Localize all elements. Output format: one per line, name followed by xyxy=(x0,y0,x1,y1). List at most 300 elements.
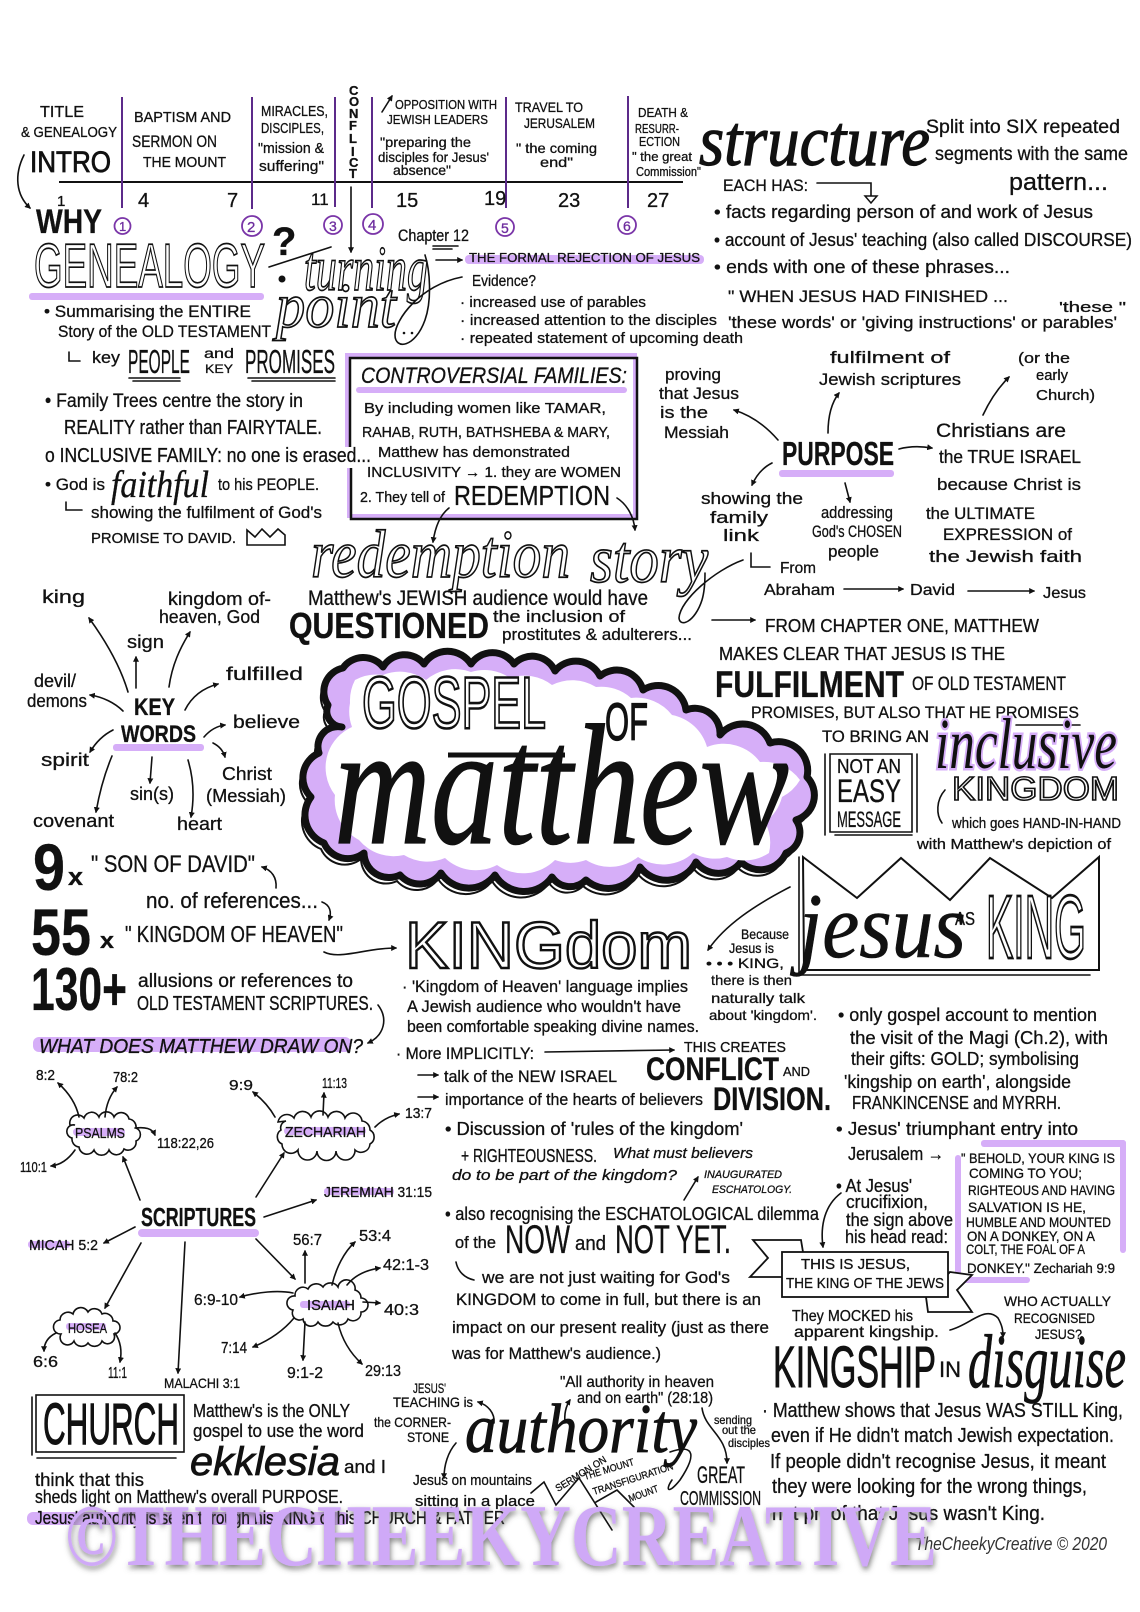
segment 5 label: ECTION xyxy=(639,134,680,149)
purpose notes: God's CHOSEN xyxy=(812,522,902,541)
key words list: kingdom of- xyxy=(168,589,271,609)
kingdom text: THIS CREATES xyxy=(684,1039,786,1056)
isaiah references: 53:4 xyxy=(359,1228,391,1245)
each has label and arrow xyxy=(723,176,877,203)
key words label: KEY xyxy=(134,694,175,721)
stat: 130+ allusions: 130+ xyxy=(31,956,127,1023)
isaiah references: 7:14 xyxy=(221,1340,247,1357)
key words highlight xyxy=(113,744,204,751)
redemption text: QUESTIONED xyxy=(289,605,489,646)
hosea cloud xyxy=(53,1308,120,1346)
conflict vertical label: L xyxy=(349,131,357,146)
scriptures hub: SCRIPTURES xyxy=(141,1202,256,1232)
highlight under title xyxy=(356,387,627,393)
arrow from intro to genealogy xyxy=(18,155,30,208)
genealogy text xyxy=(44,302,371,547)
stat: 55x kingdom of heaven: x xyxy=(100,928,115,953)
each has label and arrow: EACH HAS: xyxy=(723,176,808,195)
heading: kingdom: KINGdom xyxy=(405,908,692,982)
banner: this is Jesus: THIS IS JESUS, xyxy=(801,1256,910,1273)
zechariah references: 9:9 xyxy=(229,1077,253,1094)
key words arrows xyxy=(89,618,225,817)
teaching cornerstone note xyxy=(374,1380,494,1478)
rules of the kingdom text: + RIGHTEOUSNESS. xyxy=(461,1146,597,1166)
stat: 9x son of David: 9 xyxy=(33,830,65,904)
fulfilment text: FROM CHAPTER ONE, MATTHEW xyxy=(765,616,1039,636)
arrows to redemption story xyxy=(433,498,635,542)
structure bullet list: " WHEN JESUS HAD FINISHED ... xyxy=(728,287,1008,306)
key words list: sin(s) xyxy=(130,784,174,804)
great commission note: COMMISSION xyxy=(680,1488,761,1510)
zechariah quote with purple bracket: HUMBLE AND MOUNTED xyxy=(966,1214,1111,1230)
stat: 130+ allusions xyxy=(31,956,384,1043)
genealogy text: PROMISE TO DAVID. xyxy=(91,530,236,547)
panel: authority xyxy=(374,1374,770,1530)
church text: sheds light on Matthew's overall PURPOSE. xyxy=(35,1487,343,1507)
church text: and I xyxy=(344,1457,386,1477)
genealogy text: PROMISES xyxy=(245,343,335,380)
church text: Matthew's is the ONLY xyxy=(193,1401,350,1421)
eschatological text: KINGDOM to come in full, but there is an xyxy=(456,1290,761,1309)
intro segment: TITLE xyxy=(40,104,84,121)
chapter numbers: 15 xyxy=(396,190,418,212)
segment 1 label xyxy=(132,109,231,171)
magi and triumphant entry text: FRANKINCENSE and MYRRH. xyxy=(852,1093,1061,1113)
fulfilment text: TO BRING AN xyxy=(822,727,929,746)
genealogy text: PEOPLE xyxy=(128,343,190,380)
key words list: demons xyxy=(27,691,87,711)
purpose notes: family xyxy=(710,508,769,527)
segment 2 label: MIRACLES, xyxy=(261,103,328,120)
purpose notes: proving xyxy=(665,365,721,384)
conflict vertical label: I xyxy=(351,144,355,159)
great commission note: out the xyxy=(722,1423,756,1437)
heading: authority: authority xyxy=(465,1391,698,1468)
genealogy text: to his PEOPLE. xyxy=(218,475,319,494)
because Jesus is king note: naturally talk xyxy=(711,990,806,1006)
fulfilment text: OF OLD TESTAMENT xyxy=(912,674,1066,695)
segment 5 label: " the great xyxy=(632,149,692,164)
key words list: covenant xyxy=(33,811,114,831)
heading: kingship in disguise: KINGSHIP xyxy=(773,1335,936,1400)
purple highlight under purpose xyxy=(779,470,894,477)
purpose notes: Church) xyxy=(1036,387,1095,404)
isaiah references: 29:13 xyxy=(365,1363,401,1380)
chapter numbers: 19 xyxy=(484,188,506,210)
segment 4 label: " the coming xyxy=(516,140,597,156)
purpose notes: the TRUE ISRAEL xyxy=(939,447,1081,467)
title: matthew: matthew xyxy=(334,691,789,881)
panel: purpose xyxy=(659,348,1095,602)
heading: structure: structure xyxy=(699,101,930,181)
magi and triumphant entry text: crucifixion, xyxy=(846,1192,928,1212)
magi and triumphant entry text: Jerusalem → xyxy=(848,1144,944,1164)
panel: statistics xyxy=(31,830,396,1058)
eschatological text: and xyxy=(575,1233,606,1255)
genealogy text: KEY xyxy=(205,362,233,376)
not an easy message box: MESSAGE xyxy=(837,807,901,832)
because Jesus is king note xyxy=(706,887,817,1023)
not an easy message box: NOT AN xyxy=(837,756,901,778)
segment 2 label: "mission & xyxy=(258,140,324,157)
isaiah cloud: ISAIAH xyxy=(307,1297,355,1314)
conflict vertical label xyxy=(349,83,359,181)
isaiah references: 40:3 xyxy=(384,1302,419,1319)
psalms cloud xyxy=(67,1112,140,1155)
who recognised note: WHO ACTUALLY xyxy=(1004,1293,1112,1309)
zechariah references: 13:7 xyxy=(405,1105,432,1122)
purpose notes: the Jewish faith xyxy=(929,547,1082,566)
hosea references: 11:1 xyxy=(108,1365,127,1382)
mocked note xyxy=(792,1308,1003,1341)
purpose notes: showing the xyxy=(701,489,803,508)
box text: By including women like TAMAR, xyxy=(364,400,606,417)
purpose notes: is the xyxy=(660,403,708,422)
stat: 9x son of David: x xyxy=(68,864,84,891)
intro text: Split into SIX repeated xyxy=(926,117,1120,138)
conflict vertical label: N xyxy=(349,106,358,121)
fulfilment text: PROMISES, BUT ALSO THAT HE PROMISES xyxy=(751,703,1079,722)
who recognised note: JESUS? xyxy=(1035,1326,1082,1342)
segment number circles: 2 xyxy=(247,219,255,236)
zechariah cloud xyxy=(277,1111,374,1160)
kingdom text: importance of the hearts of believers xyxy=(445,1090,703,1109)
fulfilment text: MAKES CLEAR THAT JESUS IS THE xyxy=(719,644,1005,664)
church text: Jesus' authority is seen through his KING of his CHURCH & FATHER xyxy=(35,1508,505,1528)
box title: CONTROVERSIAL FAMILIES: xyxy=(361,363,627,388)
evidence list: · increased use of parables xyxy=(460,294,646,311)
timeline axis xyxy=(59,181,683,183)
purpose heading: PURPOSE xyxy=(782,435,894,472)
segment 1 label: THE MOUNT xyxy=(143,154,226,171)
chapter numbers: 11 xyxy=(311,190,329,209)
kingdom text xyxy=(396,977,831,1117)
kingdom text: AND xyxy=(783,1064,810,1079)
family line: Abraham to David to Jesus: David xyxy=(910,582,955,599)
purpose notes: EXPRESSION of xyxy=(943,525,1072,544)
rules of the kingdom text: do to be part of the kingdom? xyxy=(452,1167,678,1184)
box text: Matthew has demonstrated xyxy=(378,444,570,461)
stat: 55x kingdom of heaven: " KINGDOM OF HEAVEN" xyxy=(125,921,343,947)
purple highlight under genealogy xyxy=(29,293,264,300)
key words label xyxy=(121,694,196,748)
key words list: fulfilled xyxy=(226,664,303,684)
chapter numbers: 4 xyxy=(138,190,149,212)
panel: kingdom xyxy=(396,908,831,1363)
purpose notes: people xyxy=(828,542,879,561)
magi and triumphant entry text: the sign above xyxy=(846,1210,953,1230)
purpose arrows xyxy=(734,377,1009,502)
isaiah references: 9:1-2 xyxy=(287,1365,323,1382)
kingdom text: talk of the NEW ISRAEL xyxy=(444,1067,617,1086)
heading: why genealogy: ? xyxy=(272,220,296,264)
banner: this is Jesus xyxy=(750,1240,972,1312)
key words list: believe xyxy=(233,712,300,732)
heading: kingship in disguise: IN xyxy=(939,1357,961,1382)
key words list: spirit xyxy=(41,750,89,770)
not an easy message box xyxy=(825,754,917,835)
great commission note: GREAT xyxy=(697,1462,745,1489)
box text: INCLUSIVITY → 1. they are WOMEN xyxy=(367,464,621,481)
because Jesus is king note: Jesus is xyxy=(729,940,774,956)
title: gospel of: OF xyxy=(605,693,648,752)
eschatological text: NOW xyxy=(505,1218,570,1262)
genealogy text: • Summarising the ENTIRE xyxy=(44,302,251,321)
key words list: devil/ xyxy=(34,671,76,691)
segment 3 label: JEWISH LEADERS xyxy=(387,112,488,127)
purpose notes: (or the xyxy=(1018,350,1070,367)
rules of the kingdom text: INAUGURATED xyxy=(704,1169,782,1181)
church text: ekklesia xyxy=(190,1440,340,1484)
purpose notes xyxy=(659,348,1095,566)
malachi reference: MALACHI 3:1 xyxy=(164,1375,240,1391)
zechariah quote with purple bracket: " BEHOLD, YOUR KING IS xyxy=(961,1150,1115,1166)
zechariah cloud: ZECHARIAH xyxy=(285,1124,366,1141)
intro text: pattern... xyxy=(1009,169,1108,196)
segment 4 label xyxy=(515,99,597,170)
panel: turning point xyxy=(269,226,743,347)
mountains note: Jesus on mountains xyxy=(413,1472,532,1489)
segment number circles: 3 xyxy=(329,218,337,234)
stat: 55x kingdom of heaven xyxy=(31,895,396,969)
magi and triumphant entry text: his head read: xyxy=(845,1227,948,1247)
mountains note xyxy=(413,1472,535,1510)
eschatological text xyxy=(445,1204,820,1363)
segment 5 label: RESURR- xyxy=(635,121,679,136)
segment dividers xyxy=(122,96,628,209)
box text: 2. They tell of xyxy=(360,489,446,506)
because Jesus is king note: about 'kingdom'. xyxy=(709,1007,817,1023)
church text xyxy=(35,1401,505,1528)
rules of the kingdom text: • Discussion of 'rules of the kingdom' xyxy=(445,1119,743,1139)
intro text xyxy=(926,117,1128,196)
structure bullet list xyxy=(714,202,1132,332)
conflict vertical label: C xyxy=(349,83,359,98)
purpose notes: Jewish scriptures xyxy=(819,370,961,389)
zechariah quote with purple bracket: SALVATION IS HE, xyxy=(968,1199,1086,1215)
heading: turning point: point xyxy=(272,270,398,341)
great commission note: disciples xyxy=(728,1436,770,1450)
kingship text: not proof that Jesus wasn't King. xyxy=(772,1503,1045,1525)
because Jesus is king note: Because xyxy=(741,926,789,942)
chapter 12 label: Chapter 12 xyxy=(398,226,469,245)
heading: turning point xyxy=(269,233,462,344)
kingdom text: · More IMPLICITLY: xyxy=(396,1044,534,1063)
mountains note: sitting in a place xyxy=(415,1493,535,1510)
purpose notes: because Christ is xyxy=(937,475,1081,494)
conflict vertical label: F xyxy=(349,118,357,133)
panel: redemption story xyxy=(289,516,743,646)
zechariah quote with purple bracket xyxy=(955,1140,1126,1283)
zechariah quote with purple bracket: COLT, THE FOAL OF A xyxy=(966,1241,1086,1257)
heading: Jesus as King xyxy=(790,875,1086,978)
segment number circles: 4 xyxy=(368,217,376,234)
magi and triumphant entry text: the visit of the Magi (Ch.2), with xyxy=(850,1028,1108,1048)
stat: 130+ allusions: allusions or references to xyxy=(138,971,353,992)
cloud purple outer xyxy=(303,651,814,891)
stat: 9x son of David xyxy=(33,830,276,904)
magi and triumphant entry text xyxy=(822,1005,1108,1247)
segment 3 label xyxy=(378,96,497,178)
micah reference: MICAH 5:2 xyxy=(29,1237,98,1254)
kingdom text: · 'Kingdom of Heaven' language implies xyxy=(402,977,688,996)
evidence list: · repeated statement of upcoming death xyxy=(460,330,743,347)
magi and triumphant entry text: • only gospel account to mention xyxy=(838,1005,1097,1025)
heading: why genealogy: WHY xyxy=(36,203,102,241)
box text xyxy=(360,400,621,511)
psalms cloud: PSALMS xyxy=(75,1125,125,1142)
magi and triumphant entry text: their gifts: GOLD; symbolising xyxy=(851,1049,1079,1069)
magi and triumphant entry text: • At Jesus' xyxy=(836,1176,912,1196)
family line: Abraham to David to Jesus: Abraham xyxy=(764,582,835,599)
kingship text: If people didn't recognise Jesus, it meant xyxy=(770,1451,1106,1473)
panel: key words xyxy=(27,587,303,834)
chapter numbers: 7 xyxy=(227,190,238,212)
segment 4 label: JERUSALEM xyxy=(524,115,595,131)
heading: Jesus as King: jesus xyxy=(790,875,966,977)
hand in hand note: which goes HAND-IN-HAND xyxy=(951,815,1121,832)
purpose notes: Messiah xyxy=(664,423,729,442)
isaiah references: 6:9-10 xyxy=(194,1292,238,1309)
not an easy message box: EASY xyxy=(837,773,901,809)
psalms references: 78:2 xyxy=(113,1069,138,1086)
eschatological text: • also recognising the ESCHATOLOGICAL dilemma xyxy=(445,1204,820,1224)
intro segment xyxy=(21,104,117,179)
key words list: heart xyxy=(177,814,222,834)
segment 4 label: end" xyxy=(540,154,573,170)
kingship text xyxy=(762,1400,1123,1525)
chapter 12 label xyxy=(398,226,469,260)
segment number circles: 6 xyxy=(623,218,631,234)
formal rejection highlight: THE FORMAL REJECTION OF JESUS xyxy=(469,250,700,265)
chapter numbers: 23 xyxy=(558,190,580,212)
isaiah references: 42:1-3 xyxy=(383,1257,429,1274)
rules of the kingdom text: What must believers xyxy=(613,1145,754,1162)
teaching cornerstone note: STONE xyxy=(407,1429,449,1445)
panel: controversial families xyxy=(347,355,637,542)
genealogy text: showing the fulfilment of God's xyxy=(91,503,322,522)
psalms references: 118:22,26 xyxy=(157,1135,214,1152)
evidence list: · increased attention to the disciples xyxy=(460,312,717,329)
intro text: segments with the same xyxy=(935,144,1128,165)
jeremiah reference: JEREMIAH 31:15 xyxy=(324,1184,432,1201)
segment 3 label: OPPOSITION WITH xyxy=(395,97,497,112)
segment 5 label xyxy=(632,105,701,179)
heading: why genealogy xyxy=(34,203,296,301)
segment 4 label: TRAVEL TO xyxy=(515,99,583,115)
mocked note: They MOCKED his xyxy=(792,1308,913,1325)
magi and triumphant entry text: • Jesus' triumphant entry into xyxy=(836,1119,1078,1139)
genealogy text: faithful xyxy=(111,464,209,506)
key words label: WORDS xyxy=(121,721,196,748)
genealogy text: and xyxy=(204,345,234,361)
scriptures hub xyxy=(138,1202,259,1237)
cloud shadow line xyxy=(300,657,811,897)
structure bullet list: 'these " xyxy=(1059,299,1126,316)
church text: gospel to use the word xyxy=(193,1421,364,1441)
family line: Abraham to David to Jesus xyxy=(751,553,1086,602)
banner: this is Jesus: THE KING OF THE JEWS xyxy=(786,1275,944,1292)
eschatological text: we are not just waiting for God's xyxy=(481,1268,730,1287)
zechariah quote with purple bracket: COMING TO YOU; xyxy=(969,1165,1082,1181)
heading: redemption story xyxy=(311,516,743,623)
purpose notes: fulfilment of xyxy=(830,348,950,367)
panel: fulfilment and inclusive kingdom xyxy=(712,616,1121,853)
icon: small crown xyxy=(247,529,285,545)
purpose notes: the ULTIMATE xyxy=(926,504,1035,523)
segment 5 label: DEATH & xyxy=(638,105,688,120)
segment number circles: 5 xyxy=(501,220,509,236)
mocked note: apparent kingship. xyxy=(794,1324,939,1341)
zechariah references: 11:13 xyxy=(322,1075,347,1092)
box text: RAHAB, RUTH, BATHSHEBA & MARY, xyxy=(362,424,610,441)
zechariah quote with purple bracket: RIGHTEOUS AND HAVING xyxy=(968,1182,1115,1198)
isaiah cloud xyxy=(287,1280,368,1326)
segment 3 label: "preparing the xyxy=(380,134,471,150)
redemption text: the inclusion of xyxy=(493,607,625,626)
arrow to fulfilment xyxy=(712,619,755,621)
panel: why genealogy xyxy=(29,203,371,547)
eschatological text: impact on our present reality (just as there xyxy=(452,1318,769,1337)
panel: Jesus as King xyxy=(706,857,1126,1525)
conflict vertical label: T xyxy=(349,166,357,181)
heading: redemption story: redemption xyxy=(311,516,570,592)
family line: Abraham to David to Jesus: Jesus xyxy=(1043,585,1086,602)
heading: redemption story: story xyxy=(590,521,709,597)
kingdom text: CONFLICT xyxy=(646,1051,779,1087)
hand in hand note: with Matthew's depiction of xyxy=(916,836,1112,853)
stat: 130+ allusions: OLD TESTAMENT SCRIPTURES. xyxy=(137,993,373,1015)
church box xyxy=(32,1392,184,1458)
zechariah quote with purple bracket: ON A DONKEY, ON A xyxy=(967,1228,1096,1244)
signature: TheCheekyCreative © 2020 xyxy=(915,1534,1107,1554)
genealogy text: REALITY rather than FAIRYTALE. xyxy=(64,417,322,439)
because Jesus is king note: • • • KING, xyxy=(706,955,784,971)
purpose notes: early xyxy=(1036,367,1068,384)
stat: 9x son of David: " SON OF DAVID" xyxy=(91,851,255,878)
purpose notes: link xyxy=(723,526,760,545)
redemption text: Matthew's JEWISH audience would have xyxy=(308,587,648,610)
teaching cornerstone note: JESUS' xyxy=(413,1380,446,1396)
kingdom text: been comfortable speaking divine names. xyxy=(407,1017,699,1036)
segment 2 label: suffering" xyxy=(259,158,324,175)
segment 2 label xyxy=(258,103,328,175)
eschatological text: was for Matthew's audience.) xyxy=(451,1344,661,1363)
family line: Abraham to David to Jesus: From xyxy=(780,560,816,577)
hosea references: 6:6 xyxy=(33,1354,58,1371)
zechariah references xyxy=(229,1075,432,1127)
kingdom text: DIVISION. xyxy=(713,1081,831,1117)
isaiah references xyxy=(194,1228,429,1382)
hub arrows xyxy=(104,1153,316,1373)
hosea cloud: HOSEA xyxy=(68,1320,108,1336)
watermark: ©THECHEEKYCREATIVE xyxy=(65,1488,937,1585)
church box: CHURCH xyxy=(43,1392,179,1457)
key words list: heaven, God xyxy=(159,607,260,627)
intro segment: INTRO xyxy=(30,146,111,179)
structure bullet list: • facts regarding person of and work of Jesus xyxy=(714,202,1093,222)
icon: crown outline xyxy=(799,857,1099,975)
title: gospel of: GOSPEL xyxy=(362,663,546,744)
heading: why genealogy: GENEALOGY xyxy=(34,232,265,301)
genealogy text: o INCLUSIVE FAMILY: no one is erased... xyxy=(45,445,371,467)
stat: no of references note: no. of references... xyxy=(146,888,318,913)
purpose notes: Christians are xyxy=(936,421,1066,442)
great commission note xyxy=(680,1408,770,1510)
eschatological text: of the xyxy=(455,1233,496,1252)
timeline: structure of the gospel xyxy=(18,83,701,252)
all authority quote: and on earth" (28:18) xyxy=(577,1390,713,1407)
